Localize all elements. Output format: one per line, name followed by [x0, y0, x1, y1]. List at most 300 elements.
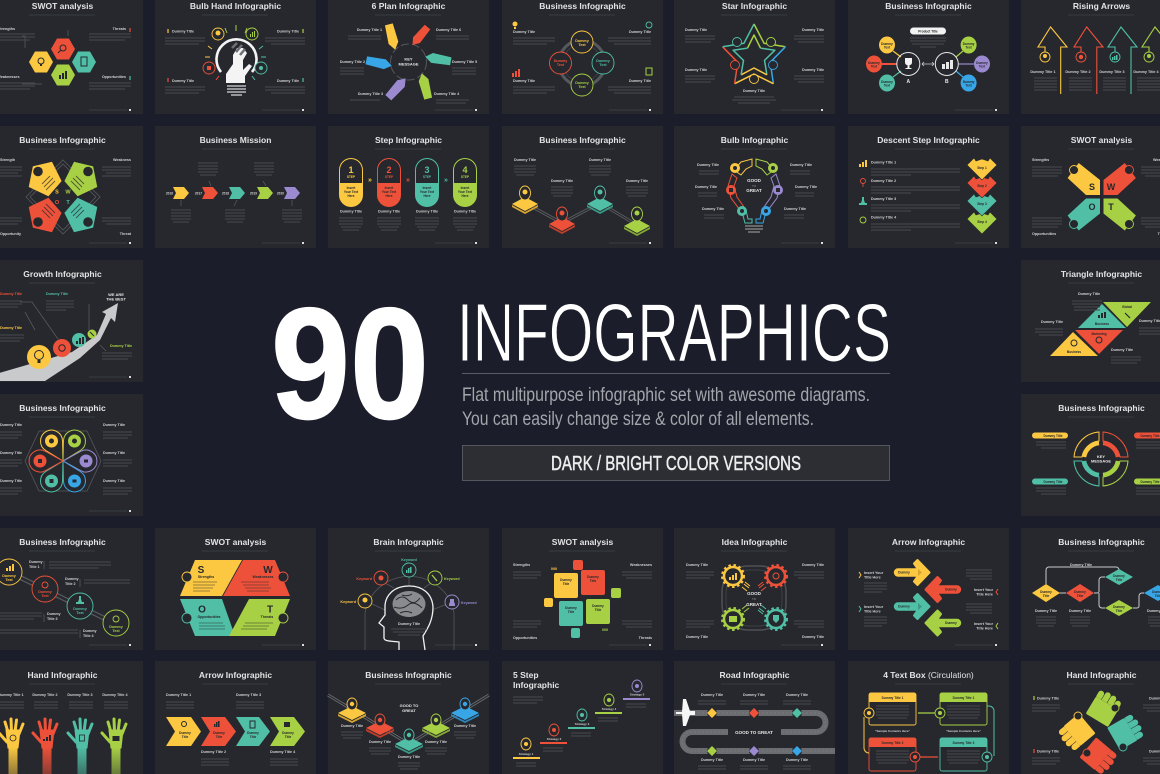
diagram: rising arrow with four balls: THE BEST	[106, 296, 126, 302]
diagram: A/B satellites: Dummy	[963, 80, 975, 84]
diagram: four rounded boxes: Dummy	[587, 575, 599, 579]
diagram: diagonal circle steps: Dummy	[65, 577, 79, 581]
diagram: rising arrow with four balls: Dummy Title	[0, 292, 22, 296]
diagram: four thick arrows: Dummy	[945, 588, 957, 592]
bulb icons and labels	[695, 163, 817, 218]
diagram: head with brain and keyword nodes	[340, 558, 477, 650]
diagram: diagonal circle steps: Dummy	[2, 574, 17, 578]
labels and text: Dummy Title	[685, 68, 707, 72]
labels: Dummy Title 1	[1030, 70, 1056, 74]
diagram: five rising steps	[513, 680, 650, 766]
diagram: head with brain and keyword nodes: Keyword	[401, 558, 418, 562]
labels: Dummy Title	[0, 451, 22, 455]
heading: Business Infographic: Business Infographic	[19, 135, 106, 145]
diagram: four rounded boxes: Title	[563, 582, 569, 586]
diagram: diamond flow chart: Dummy Title	[1069, 609, 1091, 613]
diagram: four hexagons: Opportunities	[102, 75, 126, 79]
diagram: four triangles: Dummy Title	[1041, 320, 1063, 324]
diagram: diagonal circle steps: Dummy	[73, 607, 88, 611]
panel: Brain Infographic	[328, 528, 489, 650]
diagram: six tags around key message: Dummy Title 3	[358, 92, 383, 96]
diagram: four arrows S W O T: W	[1107, 182, 1116, 192]
diagram: A/B satellites: Dummy	[868, 61, 880, 65]
labels: Dummy Title	[1037, 696, 1059, 700]
diagram: four arrows S W O T: T	[1108, 202, 1114, 212]
diagram: A/B satellites: Text	[979, 64, 986, 68]
diagram: four gears: Dummy Title	[686, 635, 708, 639]
diagram: four descending arrows: Dummy Title 2	[871, 179, 896, 183]
diagram: four chevrons: Dummy	[213, 731, 225, 735]
heading: SWOT analysis: SWOT analysis	[552, 537, 613, 547]
diagram: four chevrons: Dummy Title 4	[270, 750, 296, 754]
diagram: four step capsules	[339, 158, 477, 230]
diagram: A/B satellites: Text	[871, 64, 878, 68]
diagram: four gears: Dummy Title	[686, 563, 708, 567]
diagram: four chevrons: Title	[250, 735, 256, 739]
diagram: four quadrant ring: MESSAGE	[1091, 458, 1111, 464]
heading: Business Infographic: Business Infographic	[1058, 537, 1145, 547]
big number 90: 90	[271, 276, 429, 452]
diagram: circle cycle: Text	[557, 63, 565, 67]
diagram: four step capsules: 4	[462, 165, 468, 175]
diagram: five rising steps: Strategy 5	[630, 692, 645, 696]
diagram: five rising steps: Strategy 3	[575, 722, 590, 726]
diagram: four arrows S W O T: O	[1088, 202, 1096, 212]
diagram: four raised hands: Dummy Title 2	[32, 693, 58, 697]
diagram: hand in bulb	[165, 25, 305, 95]
diagram: four thick arrows	[859, 560, 998, 636]
labels: Dummy Title	[103, 423, 125, 427]
diagram: SWOT blocks: O	[198, 604, 206, 616]
panel: Business Infographic diagonal	[0, 528, 143, 650]
diagram: four triangles: Business	[1095, 322, 1109, 326]
diagram: six tags around key message: Dummy Title 6	[436, 28, 461, 32]
panel: Business Infographic six petals	[0, 394, 143, 516]
diagram: four triangles	[1035, 292, 1160, 363]
diagram: V-shaped isometric steps: Dummy Title	[454, 724, 476, 728]
diagram: four rounded boxes: Opportunities	[513, 636, 537, 640]
panel: Business Mission	[155, 126, 316, 248]
diagram: rising arrow with four balls: Dummy Title	[46, 292, 68, 296]
heading: Step Infographic: Step Infographic	[375, 135, 442, 145]
diagram: four descending arrows: Step 4	[977, 220, 987, 224]
diagram: four gears: Dummy Title	[802, 635, 824, 639]
diagram: circle cycle: Dummy Title	[513, 79, 535, 83]
diagram: isometric diamonds: Dummy Title	[514, 158, 536, 162]
diagram: four rounded boxes: 000	[602, 628, 608, 632]
diagram: four interlocked hands	[1056, 688, 1146, 774]
diagram: SWOT blocks: Opportunities	[198, 615, 221, 619]
diagram: four rounded boxes: Title	[590, 579, 596, 583]
heading: Business Mission: Business Mission	[200, 135, 271, 145]
heading: Business Infographic: Business Infographic	[365, 670, 452, 680]
heading: 4 Text Box (Circulation): 4 Text Box (Circulation)	[883, 670, 974, 680]
diagram: head with brain and keyword nodes: Keyword	[356, 577, 373, 581]
diagram: diagonal circle steps: Text	[5, 578, 13, 582]
labels: Dummy Title	[1037, 750, 1059, 754]
diagram: four chevrons: Dummy Title 2	[201, 750, 226, 754]
diagram: four chevrons: Title	[216, 735, 222, 739]
diagram: A/B satellites: Product Title	[918, 29, 938, 33]
diagram: hand in bulb: Dummy Title	[172, 79, 194, 83]
diagram: six tags around key message: Dummy Title 2	[340, 60, 365, 64]
diagram: diamond flow chart: Dummy	[1040, 590, 1052, 594]
diagram: A/B satellites: Dummy	[881, 42, 893, 46]
diagram: isometric diamonds: Dummy Title	[551, 179, 573, 183]
diagram: four descending arrows: Step 2	[977, 184, 987, 188]
diagram: five chevrons timeline: 2018	[222, 192, 229, 196]
diagram: diamond flow chart: Dummy Title	[1070, 563, 1092, 567]
diagram: four chevrons	[166, 693, 305, 765]
diagram: diamond flow chart	[1032, 563, 1160, 626]
panel: Growth Infographic	[0, 260, 143, 382]
callout: dark / bright color versions	[462, 446, 890, 480]
diagram: isometric diamonds: Dummy Title	[626, 179, 648, 183]
diagram: four step capsules: STEP	[385, 175, 394, 179]
diagram: head with brain and keyword nodes: Keyword	[461, 601, 477, 605]
heading: Business Infographic: Business Infographic	[19, 537, 106, 547]
diagram: four step capsules: Your Text	[382, 190, 397, 194]
diagram: four rounded boxes: Dummy	[560, 578, 572, 582]
diagram: four connected boxes: Dummy Title 3	[882, 741, 904, 745]
diagram: four raised hands	[0, 693, 129, 774]
callout: dark / bright color versions: DARK / BRIGHT COLOR VERSIONS	[551, 453, 801, 475]
panel: Star Infographic	[674, 0, 835, 114]
diagram: diamond flow chart: Title	[1077, 594, 1083, 598]
diagram: four thick arrows: Dummy	[898, 570, 910, 574]
diagram: four step capsules: Your Text	[458, 190, 473, 194]
diagram: four gears: TO	[752, 597, 757, 601]
heading: Hand Infographic: Hand Infographic	[1067, 670, 1137, 680]
diagram: four step capsules: 3	[424, 165, 430, 175]
heading: Business Infographic: Business Infographic	[539, 1, 626, 11]
diagram: V-shaped isometric steps: GREAT	[402, 708, 416, 713]
heading: SWOT analysis: SWOT analysis	[1071, 135, 1132, 145]
diagram: four thick arrows: Title Here	[976, 626, 993, 630]
heading: 5 Step Infographic: Infographic	[513, 680, 560, 690]
heading: Bulb Infographic: Bulb Infographic	[721, 135, 789, 145]
diagram: four pentagons with S W O T: W	[65, 190, 71, 196]
labels: Dummy Title 2	[1065, 70, 1091, 74]
diagram: four descending arrows: Step 3	[977, 202, 987, 206]
diagram: four step capsules: Here	[385, 194, 393, 198]
bulb icons and labels: GOOD	[747, 178, 762, 183]
diagram: diamond flow chart: Title	[1043, 594, 1049, 598]
heading: INFOGRAPHICS: INFOGRAPHICS	[457, 286, 891, 379]
heading: 5 Step Infographic: 5 Step	[513, 670, 539, 680]
diagram: diagonal circle steps: Dummy	[38, 590, 53, 594]
heading: Star Infographic: Star Infographic	[722, 1, 787, 11]
labels: Dummy Title 3	[1099, 70, 1125, 74]
labels and text	[685, 28, 824, 103]
diagram: V-shaped isometric steps	[328, 695, 489, 769]
diagram: four pentagons with S W O T: Strength	[0, 158, 16, 162]
heading: Descent Step Infographic: Descent Step Infographic	[877, 135, 980, 145]
diagram: five chevrons timeline: 2016	[166, 192, 173, 196]
diagram: four step capsules: Dummy Title	[416, 210, 438, 214]
diagram: four step capsules: Here	[461, 194, 469, 198]
diagram: winding road with plane: Dummy Title	[786, 693, 808, 697]
diagram: four thick arrows: Insert Your	[974, 622, 994, 626]
diagram: four descending arrows: Dummy Title 4	[871, 216, 897, 220]
heading: Business Infographic: Business Infographic	[19, 403, 106, 413]
diagram: A/B satellites: A	[906, 79, 910, 85]
diagram: diamond flow chart: Dummy	[1113, 605, 1125, 609]
diagram: SWOT blocks	[180, 560, 290, 636]
diagram: four triangles: Global	[1122, 305, 1132, 309]
diagram: SWOT blocks: T	[267, 604, 273, 616]
diagram: four triangles: Dummy Title	[1078, 292, 1100, 296]
diagram: four step capsules: STEP	[347, 175, 356, 179]
diagram: four quadrant ring: Dummy Title	[1043, 434, 1063, 438]
labels: Dummy Title 4	[1133, 70, 1160, 74]
diagram: four step capsules: Your Text	[420, 190, 435, 194]
diagram: diagonal circle steps: Title 1	[29, 565, 40, 569]
panel: Business Infographic circles	[502, 0, 663, 114]
diagram: A/B satellites: Dummy	[976, 61, 988, 65]
diagram: diamond flow chart: Dummy	[1113, 574, 1125, 578]
diagram: diagonal circle steps: Text	[41, 594, 49, 598]
diagram: four thick arrows: Dummy	[898, 604, 910, 608]
panel: Business Infographic flow chart	[1021, 528, 1160, 650]
diagram: diagonal circle steps: Text	[112, 629, 120, 633]
diagram: four thick arrows: Insert Your	[864, 605, 884, 609]
diagram: four quadrant ring: Dummy Title	[1140, 480, 1160, 484]
diagram: four rounded boxes: Strengths	[513, 563, 530, 567]
bulb icons and labels: Dummy Title	[795, 185, 817, 189]
diagram: four connected boxes: “Sample Contents Here”	[946, 729, 982, 733]
diagram: circle cycle: Text	[599, 63, 607, 67]
diagram: four step capsules: Here	[347, 194, 355, 198]
diagram: four connected boxes: “Sample Contents Here”	[875, 729, 911, 733]
diagram: diagonal circle steps: Title 4	[83, 634, 95, 638]
diagram: diagonal circle steps: Dummy	[47, 612, 61, 616]
panel: Bulb Hand Infographic	[155, 0, 316, 114]
heading: Business Infographic: Business Infographic	[1058, 403, 1145, 413]
panel: Arrow Infographic chevrons	[155, 661, 316, 774]
diagram: four descending arrows: Step 1	[977, 166, 987, 170]
heading: Business Infographic: Business Infographic	[885, 1, 972, 11]
diagram: rising arrow with four balls	[0, 292, 132, 381]
labels and text: Dummy Title	[743, 89, 765, 93]
diagram: four chevrons: Title	[285, 735, 291, 739]
diagram: four step capsules: Dummy Title	[378, 210, 400, 214]
panel: 4 Text Box (Circulation)	[848, 661, 1009, 774]
diagram: diagonal circle steps: Dummy	[29, 560, 43, 564]
diagram: four rounded boxes: 000	[551, 567, 557, 571]
bulb icons and labels: Dummy Title	[697, 163, 719, 167]
diagram: diagonal circle steps: Title 2	[65, 582, 76, 586]
diagram: four thick arrows: Title Here	[864, 576, 881, 580]
heading: Growth Infographic: Growth Infographic	[23, 269, 102, 279]
diagram: four rounded boxes: Dummy	[565, 606, 577, 610]
diagram: four descending arrows: Dummy Title 1	[871, 160, 896, 164]
heading: Triangle Infographic: Triangle Infographic	[1061, 269, 1142, 279]
diagram: head with brain and keyword nodes: Keyword	[340, 600, 357, 604]
diagram: four pentagons with S W O T	[0, 158, 132, 236]
panel: Rising Arrows	[1021, 0, 1160, 114]
diagram: four step capsules: Insert	[423, 186, 432, 190]
diagram: five rising steps: Strategy 2	[547, 737, 562, 741]
diagram: A/B satellites: Text	[965, 46, 973, 50]
heading: Brain Infographic: Brain Infographic	[373, 537, 444, 547]
diagram: four gears	[686, 563, 824, 639]
panel: SWOT analysis parallelograms	[155, 528, 316, 650]
diagram: four step capsules: 2	[386, 165, 392, 175]
diagram: four pentagons with S W O T: T	[66, 200, 70, 206]
heading: SWOT analysis: SWOT analysis	[32, 1, 93, 11]
central title block	[271, 276, 891, 480]
panel: Descent Step Infographic	[848, 126, 1009, 248]
diagram: diagonal circle steps: Text	[76, 611, 84, 615]
diagram: A/B satellites: Dummy	[881, 80, 893, 84]
diagram: four pentagons with S W O T: Threat	[120, 232, 132, 236]
description text	[462, 384, 870, 430]
labels: Dummy Title	[103, 451, 125, 455]
diagram: four rounded boxes: Weaknesses	[630, 563, 652, 567]
heading: Idea Infographic: Idea Infographic	[722, 537, 788, 547]
diagram: five chevrons timeline	[166, 163, 302, 222]
panel: Hand Infographic raised hands	[0, 661, 143, 774]
diagram: V-shaped isometric steps: GOOD TO	[400, 703, 418, 708]
diagram: head with brain and keyword nodes: Dummy Title	[398, 622, 420, 626]
heading: Business Infographic: Business Infographic	[539, 135, 626, 145]
diagram: rising arrow with four balls: WE ARE	[108, 292, 124, 297]
panel: Hand Infographic puzzle	[1021, 661, 1160, 774]
diagram: four gears: GREAT	[746, 602, 762, 607]
diagram: circle cycle: Dummy Title	[629, 79, 651, 83]
diagram: four arrows S W O T: Strengths	[1032, 158, 1049, 162]
diagram: four chevrons: Dummy	[179, 731, 191, 735]
diagram: four hexagons: Threats	[113, 27, 126, 31]
diagram: winding road with plane: Dummy Title	[786, 758, 808, 762]
diagram: circle cycle: Dummy	[554, 59, 568, 63]
heading: 6 Plan Infographic: 6 Plan Infographic	[372, 1, 446, 11]
diagram: five chevrons timeline: 2020	[277, 192, 284, 196]
diagram: diagonal circle steps: Dummy	[83, 629, 97, 633]
description text: You can easily change size & color of all elements.	[462, 408, 814, 430]
diagram: five rising steps: Strategy 1	[519, 752, 534, 756]
heading: Hand Infographic: Hand Infographic	[28, 670, 98, 680]
diagram: circle cycle: Dummy	[596, 59, 611, 63]
diagram: four thick arrows: Dummy	[945, 621, 957, 625]
diagram: four step capsules: Dummy Title	[340, 210, 362, 214]
diagram: four pentagons with S W O T: O	[55, 200, 60, 206]
labels: Dummy Title	[0, 423, 22, 427]
diagram: circle cycle: Dummy Title	[513, 30, 535, 34]
diagram: four triangles: Marketing	[1091, 332, 1107, 336]
diagram: four thick arrows: Title Here	[864, 610, 881, 614]
diagram: six tags around key message: MESSAGE	[398, 62, 419, 66]
diagram: diamond flow chart: Title	[1116, 578, 1122, 582]
diagram: four triangles: Dummy Title	[1111, 348, 1133, 352]
heading: Rising Arrows: Rising Arrows	[1073, 1, 1130, 11]
panel: Business Infographic pentagons	[0, 126, 143, 248]
diagram: hand in bulb: Dummy Title	[172, 30, 194, 34]
diagram: V-shaped isometric steps: Dummy Title	[398, 755, 420, 759]
diagram: A/B satellites: B	[945, 79, 949, 85]
diagram: SWOT blocks: Threats	[261, 615, 273, 619]
diagram: four chevrons: Title	[182, 735, 188, 739]
diagram: A/B satellites: Text	[884, 84, 891, 88]
diagram: winding road with plane: Dummy Title	[701, 693, 723, 697]
panel: SWOT analysis rounded boxes	[502, 528, 663, 650]
diagram: four step capsules: »	[444, 177, 448, 184]
diagram: four gears: Dummy Title	[802, 563, 824, 567]
diagram: diamond flow chart: Title	[1116, 609, 1122, 613]
panel: Bulb Infographic	[674, 126, 835, 248]
diagram: diagonal circle steps: Dummy	[109, 625, 124, 629]
diagram: four pentagons with S W O T: Opportunity	[0, 232, 22, 236]
bulb icons and labels: TO	[752, 184, 757, 188]
diagram: four step capsules: Insert	[347, 186, 356, 190]
diagram: five rising steps: Strategy 4	[602, 707, 617, 711]
diagram: segmented bulb	[728, 159, 780, 232]
diagram: four step capsules: 1	[348, 165, 354, 175]
diagram: four gears: GOOD	[747, 591, 762, 596]
labels	[0, 423, 132, 494]
diagram: diamond flow chart: Dummy Title	[1035, 609, 1057, 613]
diagram: four raised hands: Dummy Title 4	[102, 693, 129, 697]
diagram: hand in bulb: Dummy Title	[277, 30, 299, 34]
diagram: four rounded boxes: Threats	[639, 636, 652, 640]
diagram: four arrows S W O T: Opportunities	[1032, 232, 1056, 236]
diagram: six tags around key message: Dummy Title 5	[452, 60, 477, 64]
diagram: circle cycle: Text	[578, 85, 586, 89]
diagram: circle cycle: Dummy Title	[629, 30, 651, 34]
diagram: four step capsules: »	[368, 177, 372, 184]
diagram: four step capsules: STEP	[423, 175, 432, 179]
diagram: five chevrons timeline: 2017	[195, 192, 202, 196]
diagram: A/B satellites: Text	[884, 46, 891, 50]
bulb icons and labels: GREAT	[746, 188, 762, 193]
diagram: A/B satellites: Text	[965, 84, 973, 88]
diagram: four pentagons with S W O T: Weakness	[113, 158, 131, 162]
diagram: four triangles: Business	[1067, 350, 1081, 354]
bulb icons and labels: Dummy Title	[695, 185, 717, 189]
diagram: circle cycle: Dummy	[575, 81, 590, 85]
diagram: four step capsules: Insert	[385, 186, 394, 190]
diagram: four raised hands: Dummy Title 3	[67, 693, 93, 697]
diagram: four arrows S W O T	[1032, 158, 1160, 236]
diagram: hand in bulb: Dummy Title	[277, 79, 299, 83]
diagram: circle cycle: Text	[578, 43, 586, 47]
diagram: six tags around key message: Dummy Title 4	[434, 92, 460, 96]
panel: Business Infographic isometric zigzag	[502, 126, 663, 248]
diagram: rising arrow with four balls: Dummy Title	[0, 326, 22, 330]
labels: Dummy Title	[103, 479, 125, 483]
diagram: diagonal circle steps: Title 3	[47, 617, 58, 621]
panel: Arrow Infographic four directions	[848, 528, 1009, 650]
diagram: circle cycle	[512, 22, 652, 96]
diagram: four hexagons	[0, 27, 131, 89]
diagram: four connected boxes: Dummy Title 3	[953, 741, 975, 745]
diagram: four descending arrows	[859, 158, 997, 234]
diagram: four rounded boxes	[513, 560, 652, 640]
description text: Flat multipurpose infographic set with awesome diagrams.	[462, 384, 870, 406]
labels	[1030, 70, 1160, 90]
diagram: rising arrow with four balls: Dummy Title	[110, 344, 132, 348]
diagram: four pentagons with S W O T: S	[55, 190, 59, 196]
diagram: four quadrant ring: Dummy Title	[1043, 480, 1063, 484]
diagram: four connected boxes: Dummy Title 1	[953, 696, 975, 700]
panel: Idea Infographic	[674, 528, 835, 650]
diagram: four outlined arrows	[1038, 27, 1160, 94]
diagram: winding road with plane: Dummy Title	[743, 693, 765, 697]
diagram: six tags around key message: KEY	[404, 56, 413, 62]
diagram: winding road with plane: Dummy Title	[743, 758, 765, 762]
diagram: six teardrop petals	[25, 426, 101, 496]
